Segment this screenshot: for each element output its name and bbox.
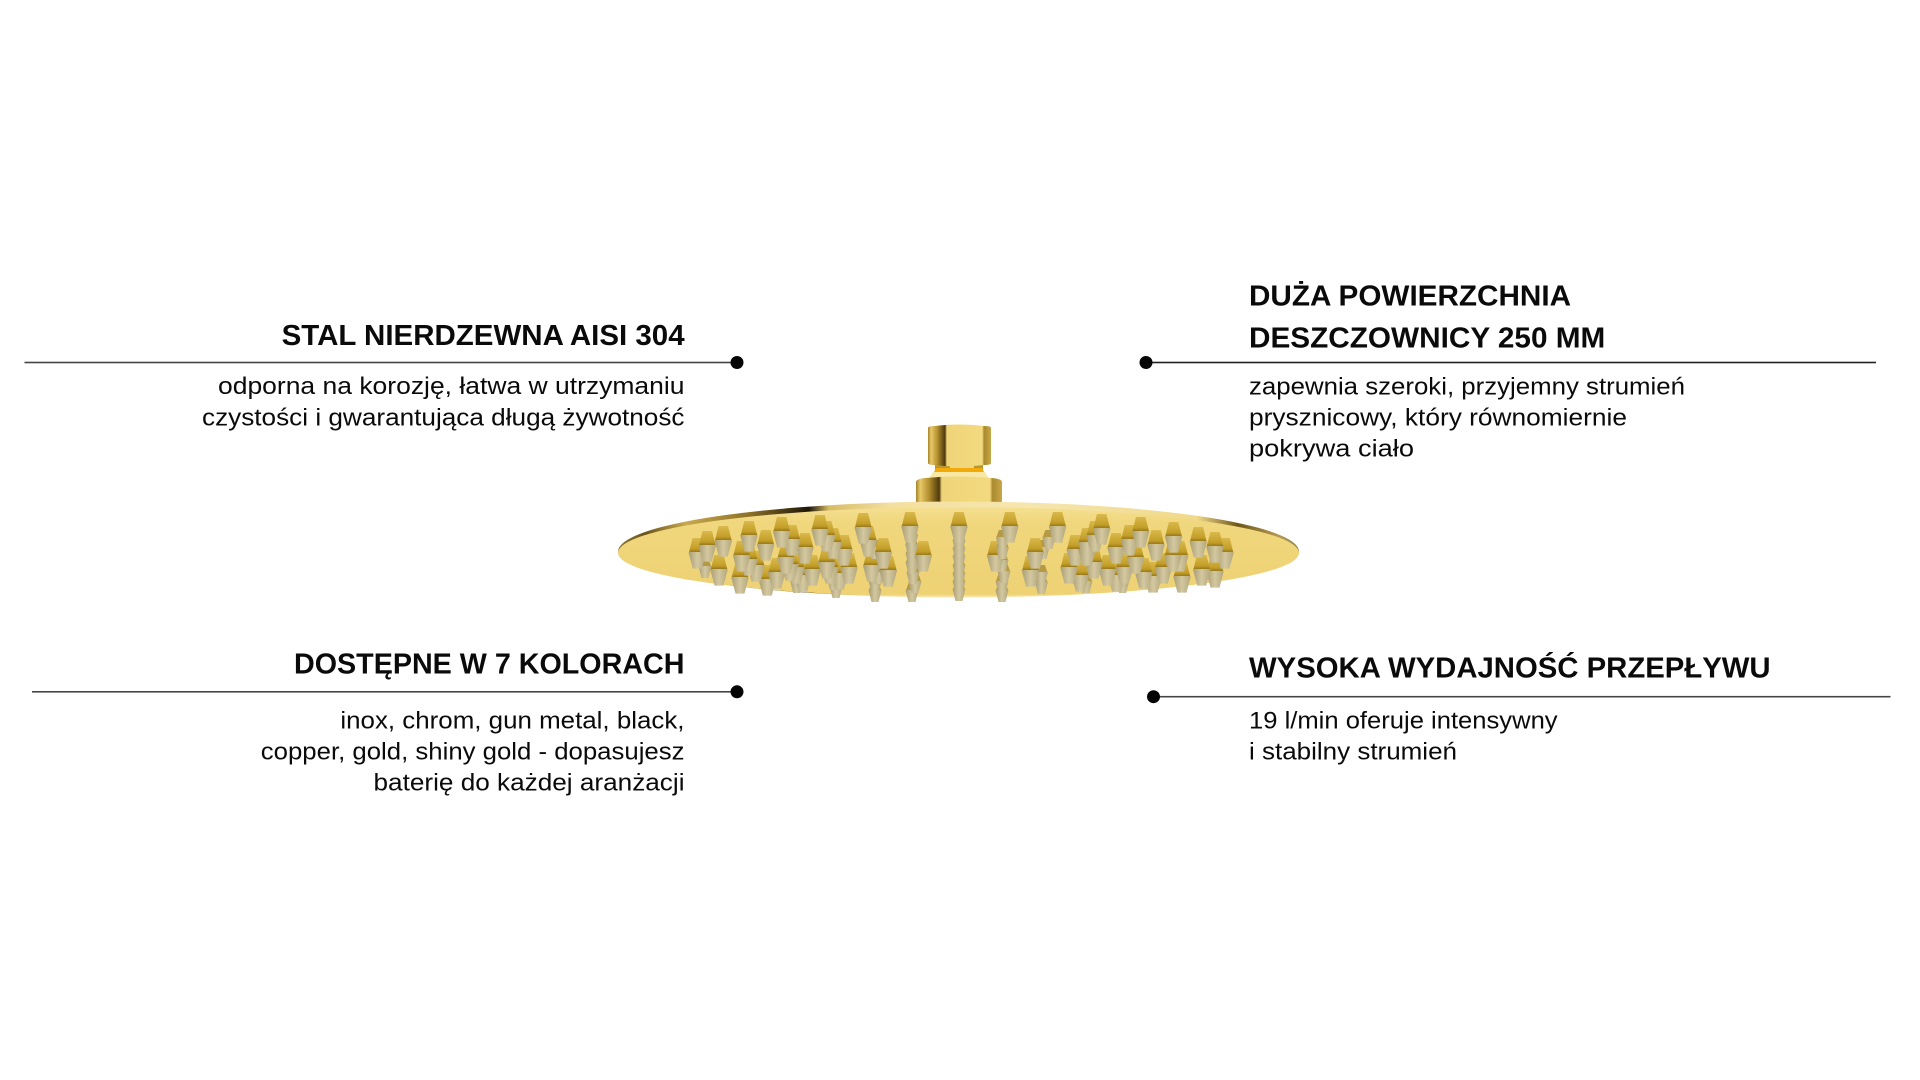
shower head illustration xyxy=(618,424,1299,602)
nozzles right xyxy=(987,512,1234,602)
nozzles left xyxy=(688,512,932,602)
description: large surface: zapewnia szeroki, przyjemny strumień xyxy=(1249,374,1685,400)
heading: colours: DOSTĘPNE W 7 KOLORACH xyxy=(294,648,684,680)
leader line with dot xyxy=(32,685,744,698)
description: flow rate: 19 l/min oferuje intensywny xyxy=(1249,707,1558,734)
heading: large surface: DESZCZOWNICY 250 MM xyxy=(1249,322,1605,354)
disc face xyxy=(618,507,1299,597)
leader line with dot xyxy=(24,356,744,369)
description: flow rate xyxy=(1249,707,1558,765)
description: colours: inox, chrom, gun metal, black, xyxy=(340,707,684,734)
callout: flow rate xyxy=(1147,651,1890,765)
description: large surface: prysznicowy, który równomiernie xyxy=(1249,404,1627,432)
description: stainless steel xyxy=(202,373,684,432)
description: colours: baterię do każdej aranżacji xyxy=(374,769,684,796)
heading: stainless steel: STAL NIERDZEWNA AISI 304 xyxy=(282,320,685,352)
shower arm connector xyxy=(916,424,1002,502)
leader line with dot xyxy=(1140,356,1876,369)
description: flow rate: i stabilny strumień xyxy=(1249,738,1457,765)
description: colours: copper, gold, shiny gold - dopasujesz xyxy=(261,738,684,765)
callout: large surface xyxy=(1140,280,1876,462)
disc rim xyxy=(618,502,1299,597)
heading: large surface: DUŻA POWIERZCHNIA xyxy=(1249,280,1571,312)
heading: flow rate: WYSOKA WYDAJNOŚĆ PRZEPŁYWU xyxy=(1249,651,1771,685)
description: stainless steel: odporna na korozję, łatwa w utrzymaniu xyxy=(218,373,684,400)
leader line with dot xyxy=(1147,690,1890,703)
description: large surface xyxy=(1249,374,1685,462)
heading: large surface xyxy=(1249,280,1605,354)
callout: colours xyxy=(32,648,744,796)
callout: stainless steel xyxy=(24,320,744,432)
description: stainless steel: czystości i gwarantująca długą żywotność xyxy=(202,404,684,432)
description: large surface: pokrywa ciało xyxy=(1249,436,1414,462)
nozzles centre column xyxy=(950,512,968,601)
description: colours xyxy=(261,707,684,796)
